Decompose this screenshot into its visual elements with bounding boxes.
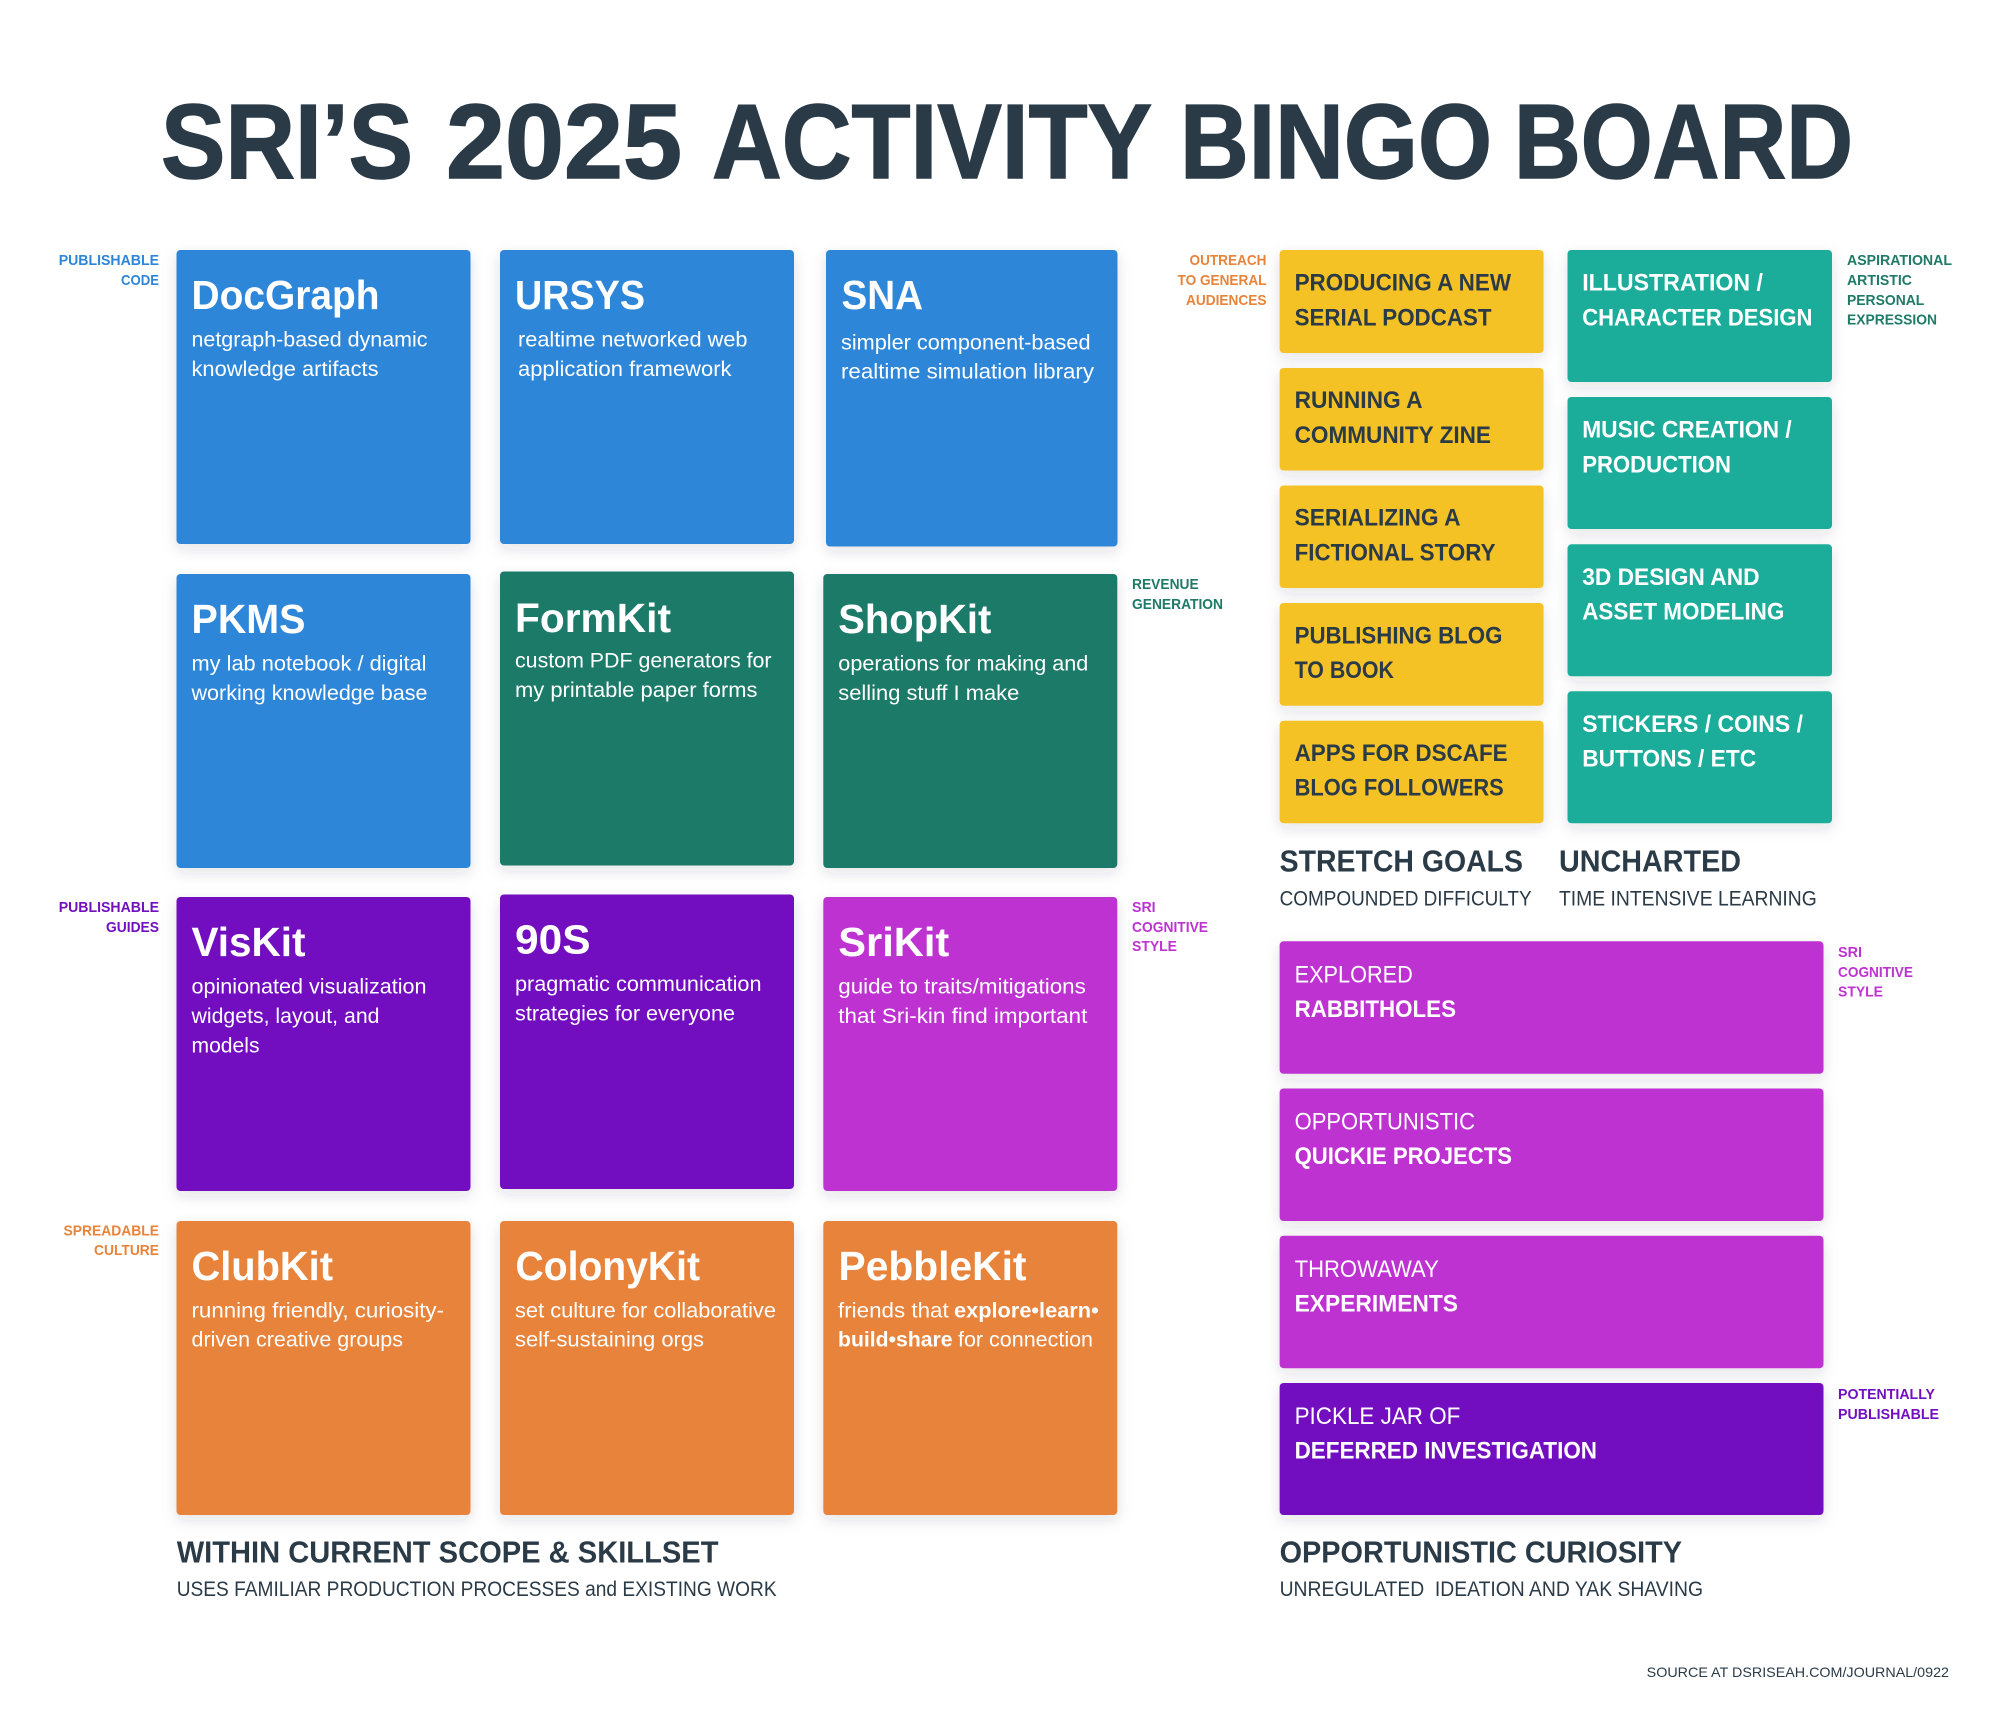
card: throwaway experiments: EXPERIMENTS — [1295, 1291, 1458, 1318]
card: URSYS — [500, 250, 794, 544]
card: illustration — [1568, 250, 1832, 382]
card: DocGraph: netgraph-based dynamic — [192, 329, 428, 352]
label: spreadable culture: CULTURE — [94, 1242, 159, 1259]
label: revenue generation: GENERATION — [1132, 596, 1223, 613]
card: stickers: BUTTONS / ETC — [1582, 746, 1756, 773]
card: fictional story: SERIALIZING A — [1295, 505, 1461, 532]
source note: SOURCE AT DSRISEAH.COM/JOURNAL/0922 — [1647, 1664, 1949, 1680]
card: SNA: SNA — [842, 272, 923, 318]
label: aspirational artistic personal expression: PERSONAL — [1847, 292, 1924, 309]
label: publishable code: PUBLISHABLE — [59, 252, 159, 269]
card: pickle jar — [1280, 1383, 1824, 1515]
card: quickie projects — [1280, 1088, 1824, 1221]
card: FormKit: custom PDF generators for — [515, 650, 772, 673]
card: blog to book: TO BOOK — [1295, 657, 1394, 684]
heading: opportunistic curiosity: UNREGULATED IDEATION AND YAK SHAVING — [1280, 1577, 1703, 1601]
card: ColonyKit: self-sustaining orgs — [515, 1329, 704, 1352]
card: pickle jar: DEFERRED INVESTIGATION — [1295, 1438, 1597, 1464]
label: aspirational artistic personal expression: ARTISTIC — [1847, 272, 1912, 289]
label: outreach to general audiences: TO GENERAL — [1178, 272, 1266, 289]
label: aspirational artistic personal expression: ASPIRATIONAL — [1847, 252, 1952, 269]
card: PKMS: my lab notebook / digital — [192, 653, 426, 676]
card: ShopKit: ShopKit — [838, 596, 992, 642]
card: PebbleKit: for connection — [958, 1329, 1093, 1352]
card: ShopKit — [823, 574, 1117, 868]
card: DocGraph — [176, 250, 470, 544]
label: spreadable culture — [64, 1223, 159, 1259]
card: ColonyKit — [500, 1221, 794, 1515]
card: FormKit: my printable paper forms — [515, 679, 758, 702]
card: SNA — [826, 250, 1118, 546]
title: BOARD — [1514, 83, 1853, 201]
label: potentially publishable — [1838, 1386, 1939, 1423]
card: explored rabbitholes — [1280, 941, 1824, 1074]
label: publishable guides: PUBLISHABLE — [59, 899, 159, 916]
card: ShopKit: operations for making and — [838, 653, 1088, 676]
card: SriKit: that Sri-kin find important — [838, 1005, 1087, 1028]
card: DocGraph: knowledge artifacts — [192, 358, 378, 381]
card: PebbleKit: friends that — [838, 1299, 949, 1322]
title: ACTIVITY — [712, 83, 1152, 201]
card: SriKit: guide to traits/mitigations — [838, 976, 1086, 999]
label: publishable code: CODE — [121, 272, 159, 289]
card: PebbleKit: explore•learn• — [954, 1299, 1099, 1322]
card: blog to book: PUBLISHING BLOG — [1295, 622, 1502, 649]
label: publishable guides — [59, 899, 159, 936]
card: VisKit: models — [192, 1034, 260, 1058]
card: ClubKit: running friendly, curiosity- — [192, 1299, 444, 1322]
card: explored rabbitholes: RABBITHOLES — [1295, 996, 1456, 1023]
card: ClubKit: driven creative groups — [192, 1329, 403, 1352]
label: sri cognitive style (left): STYLE — [1132, 938, 1177, 955]
card: throwaway experiments: THROWAWAY — [1295, 1256, 1439, 1283]
label: spreadable culture: SPREADABLE — [64, 1223, 159, 1240]
card: SNA: realtime simulation library — [841, 360, 1095, 383]
card: serial podcast — [1280, 250, 1544, 353]
card: URSYS: URSYS — [515, 272, 645, 318]
card: ClubKit: ClubKit — [192, 1243, 333, 1289]
card: music — [1568, 397, 1832, 529]
label: outreach to general audiences: AUDIENCES — [1186, 292, 1266, 309]
label: publishable code — [59, 252, 159, 289]
label: outreach to general audiences: OUTREACH — [1190, 252, 1266, 269]
label: aspirational artistic personal expression — [1847, 252, 1952, 328]
card: FormKit: FormKit — [515, 595, 671, 641]
label: sri cognitive style (right) — [1838, 944, 1913, 1000]
title: SRI’S — [161, 83, 413, 201]
heading: uncharted: UNCHARTED — [1559, 844, 1741, 879]
card: SriKit: SriKit — [838, 919, 950, 965]
card: serial podcast: PRODUCING A NEW — [1295, 270, 1512, 297]
card: pickle jar: PICKLE JAR OF — [1295, 1403, 1460, 1430]
card: illustration: CHARACTER DESIGN — [1582, 304, 1812, 331]
card: 90S: strategies for everyone — [515, 1002, 735, 1026]
label: potentially publishable: PUBLISHABLE — [1838, 1406, 1939, 1423]
card: PebbleKit: build•share — [838, 1329, 953, 1352]
card: VisKit: VisKit — [192, 919, 306, 965]
card: PebbleKit — [823, 1221, 1117, 1515]
card: community zine — [1280, 368, 1544, 470]
heading: within current scope: WITHIN CURRENT SCOPE & SKILLSET — [177, 1535, 719, 1570]
card: PKMS: PKMS — [192, 596, 306, 642]
label: sri cognitive style (left): COGNITIVE — [1132, 919, 1208, 936]
card: community zine: COMMUNITY ZINE — [1295, 422, 1491, 449]
card: community zine: RUNNING A — [1295, 387, 1423, 414]
heading: opportunistic curiosity: OPPORTUNISTIC CURIOSITY — [1280, 1535, 1682, 1570]
card: stickers: STICKERS / COINS / — [1582, 711, 1803, 738]
card: 90S: pragmatic communication — [515, 973, 762, 996]
card: dscafe apps: BLOG FOLLOWERS — [1295, 775, 1504, 802]
label: publishable guides: GUIDES — [106, 919, 159, 936]
card: VisKit — [176, 897, 470, 1191]
label: revenue generation — [1132, 576, 1223, 613]
card: dscafe apps: APPS FOR DSCAFE — [1295, 740, 1508, 767]
card: blog to book — [1280, 603, 1544, 706]
label: revenue generation: REVENUE — [1132, 576, 1199, 593]
label: sri cognitive style (left) — [1132, 899, 1208, 955]
label: sri cognitive style (left): SRI — [1132, 899, 1156, 916]
heading: uncharted: TIME INTENSIVE LEARNING — [1559, 886, 1817, 910]
heading: opportunistic curiosity — [1280, 1535, 1703, 1601]
card: stickers — [1568, 691, 1832, 823]
heading: uncharted — [1559, 844, 1817, 910]
card: DocGraph: DocGraph — [192, 272, 380, 318]
card: VisKit: opinionated visualization — [192, 976, 426, 999]
label: sri cognitive style (right): STYLE — [1838, 984, 1883, 1000]
card: ColonyKit: ColonyKit — [516, 1243, 700, 1289]
card: quickie projects: QUICKIE PROJECTS — [1295, 1143, 1512, 1170]
title: 2025 — [446, 83, 682, 201]
card: PKMS: working knowledge base — [190, 682, 428, 705]
card: 90S — [500, 894, 794, 1189]
card: fictional story — [1280, 486, 1544, 588]
label: aspirational artistic personal expression: EXPRESSION — [1847, 312, 1937, 328]
card: fictional story: FICTIONAL STORY — [1295, 539, 1496, 566]
card: SNA: simpler component-based — [841, 331, 1090, 354]
card: 90S: 90S — [515, 916, 590, 962]
title: BINGO — [1180, 83, 1492, 201]
heading: within current scope: USES FAMILIAR PRODUCTION PROCESSES and EXISTING WORK — [177, 1577, 777, 1601]
card: 3d design: ASSET MODELING — [1582, 599, 1784, 626]
heading: within current scope — [177, 1535, 777, 1601]
card: 3d design: 3D DESIGN AND — [1582, 564, 1760, 591]
card: SriKit — [823, 897, 1117, 1191]
card: ShopKit: selling stuff I make — [838, 682, 1019, 705]
heading: stretch goals: COMPOUNDED DIFFICULTY — [1280, 886, 1532, 910]
label: sri cognitive style (right): SRI — [1838, 944, 1862, 961]
card: ColonyKit: set culture for collaborative — [515, 1299, 776, 1322]
heading: stretch goals — [1280, 844, 1532, 910]
card: VisKit: widgets, layout, and — [190, 1005, 380, 1028]
card: URSYS: application framework — [518, 358, 732, 381]
card: music: PRODUCTION — [1582, 451, 1731, 478]
label: sri cognitive style (right): COGNITIVE — [1838, 964, 1913, 981]
card: throwaway experiments — [1280, 1236, 1824, 1368]
card: dscafe apps — [1280, 721, 1544, 823]
label: outreach to general audiences — [1178, 252, 1266, 309]
card: quickie projects: OPPORTUNISTIC — [1295, 1109, 1475, 1136]
heading: stretch goals: STRETCH GOALS — [1280, 844, 1523, 879]
card: music: MUSIC CREATION / — [1582, 417, 1792, 444]
card: 3d design — [1568, 544, 1832, 676]
title — [161, 83, 1853, 201]
card: serial podcast: SERIAL PODCAST — [1295, 304, 1492, 331]
card: illustration: ILLUSTRATION / — [1582, 270, 1763, 297]
card: PebbleKit: PebbleKit — [838, 1243, 1027, 1289]
card: FormKit — [500, 572, 794, 866]
card: ClubKit — [176, 1221, 470, 1515]
card: URSYS: realtime networked web — [518, 329, 748, 352]
label: potentially publishable: POTENTIALLY — [1838, 1386, 1935, 1403]
card: explored rabbitholes: EXPLORED — [1295, 962, 1413, 989]
card: PKMS — [176, 574, 470, 868]
